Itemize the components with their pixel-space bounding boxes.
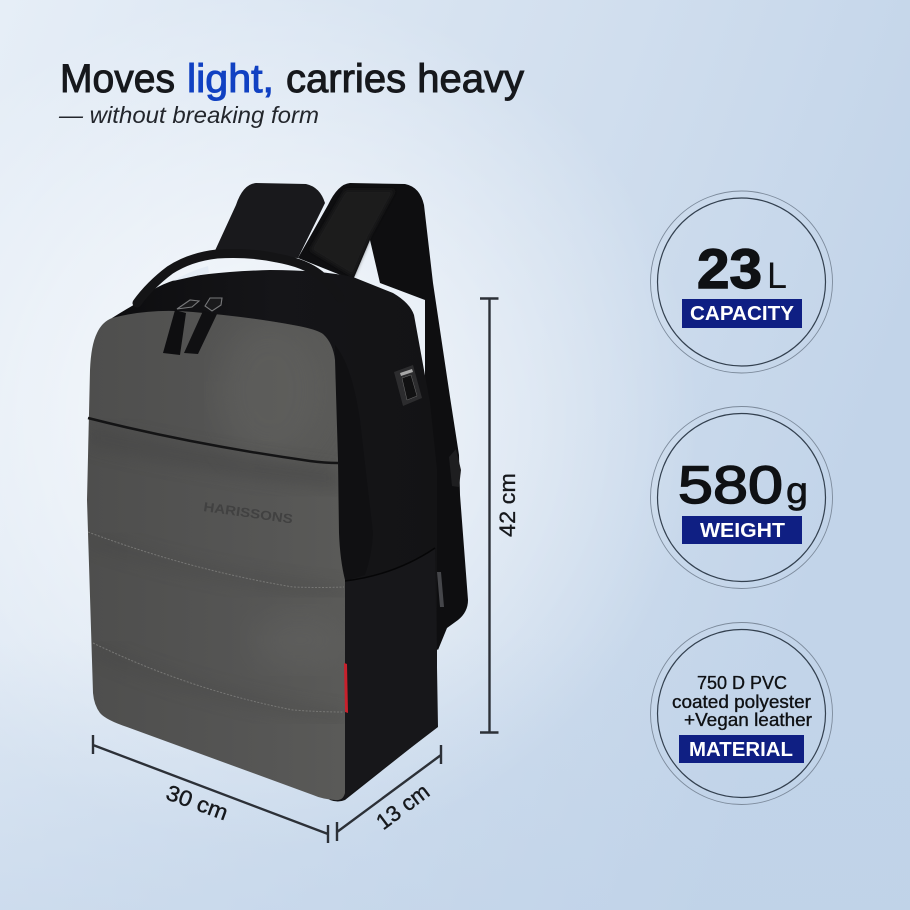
heading (60, 57, 524, 101)
dimension: width (93, 735, 328, 843)
side lower panel (345, 548, 438, 798)
zipper pocket line (88, 418, 338, 463)
zipper pull right (184, 311, 217, 354)
badge: weight (650, 406, 832, 588)
badge: material: 750 D PVC (697, 673, 787, 693)
label: 13 cm: 13 cm (371, 779, 434, 835)
strap buckle (449, 449, 461, 487)
badge: capacity: CAPACITY (690, 303, 795, 325)
heading: light, (187, 57, 274, 101)
backpack illustration (87, 183, 468, 802)
strap highlight (310, 190, 395, 276)
dimension: height (480, 298, 498, 733)
quilting seam lower (93, 643, 344, 712)
badge: weight: g (786, 470, 808, 511)
side seam (345, 548, 435, 581)
zipper pull left (163, 310, 186, 355)
front panel (87, 311, 345, 800)
side zipper (437, 572, 444, 607)
subheading: — without breaking form (58, 102, 319, 128)
back shoulder strap (213, 183, 325, 258)
badge: capacity: 23 (697, 237, 762, 300)
badge: weight: WEIGHT (700, 520, 785, 542)
badge: material (650, 622, 832, 804)
handle gap (173, 266, 209, 281)
badge: weight: 580 (678, 456, 783, 515)
front shoulder strap (298, 183, 468, 650)
badge: material: MATERIAL (689, 739, 793, 761)
side mesh panel (335, 345, 373, 581)
red tag (344, 663, 348, 713)
side label patch (394, 365, 422, 406)
body back and side (112, 270, 437, 802)
badge: capacity: L (767, 255, 787, 296)
heading: Moves (60, 57, 175, 101)
quilting seam upper (88, 532, 344, 588)
front panel shading (272, 467, 332, 482)
badge: material: coated polyester (672, 692, 811, 712)
badge: material: +Vegan leather (684, 710, 812, 730)
dimension: depth (337, 745, 441, 841)
heading: carries heavy (286, 57, 524, 101)
zipper sliders (177, 298, 222, 311)
label: 30 cm: 30 cm (163, 780, 232, 825)
badge: capacity (650, 191, 832, 373)
top handle (137, 254, 340, 303)
label: 42 cm: 42 cm (495, 473, 520, 537)
brand logo: HARISSONS (203, 499, 294, 527)
